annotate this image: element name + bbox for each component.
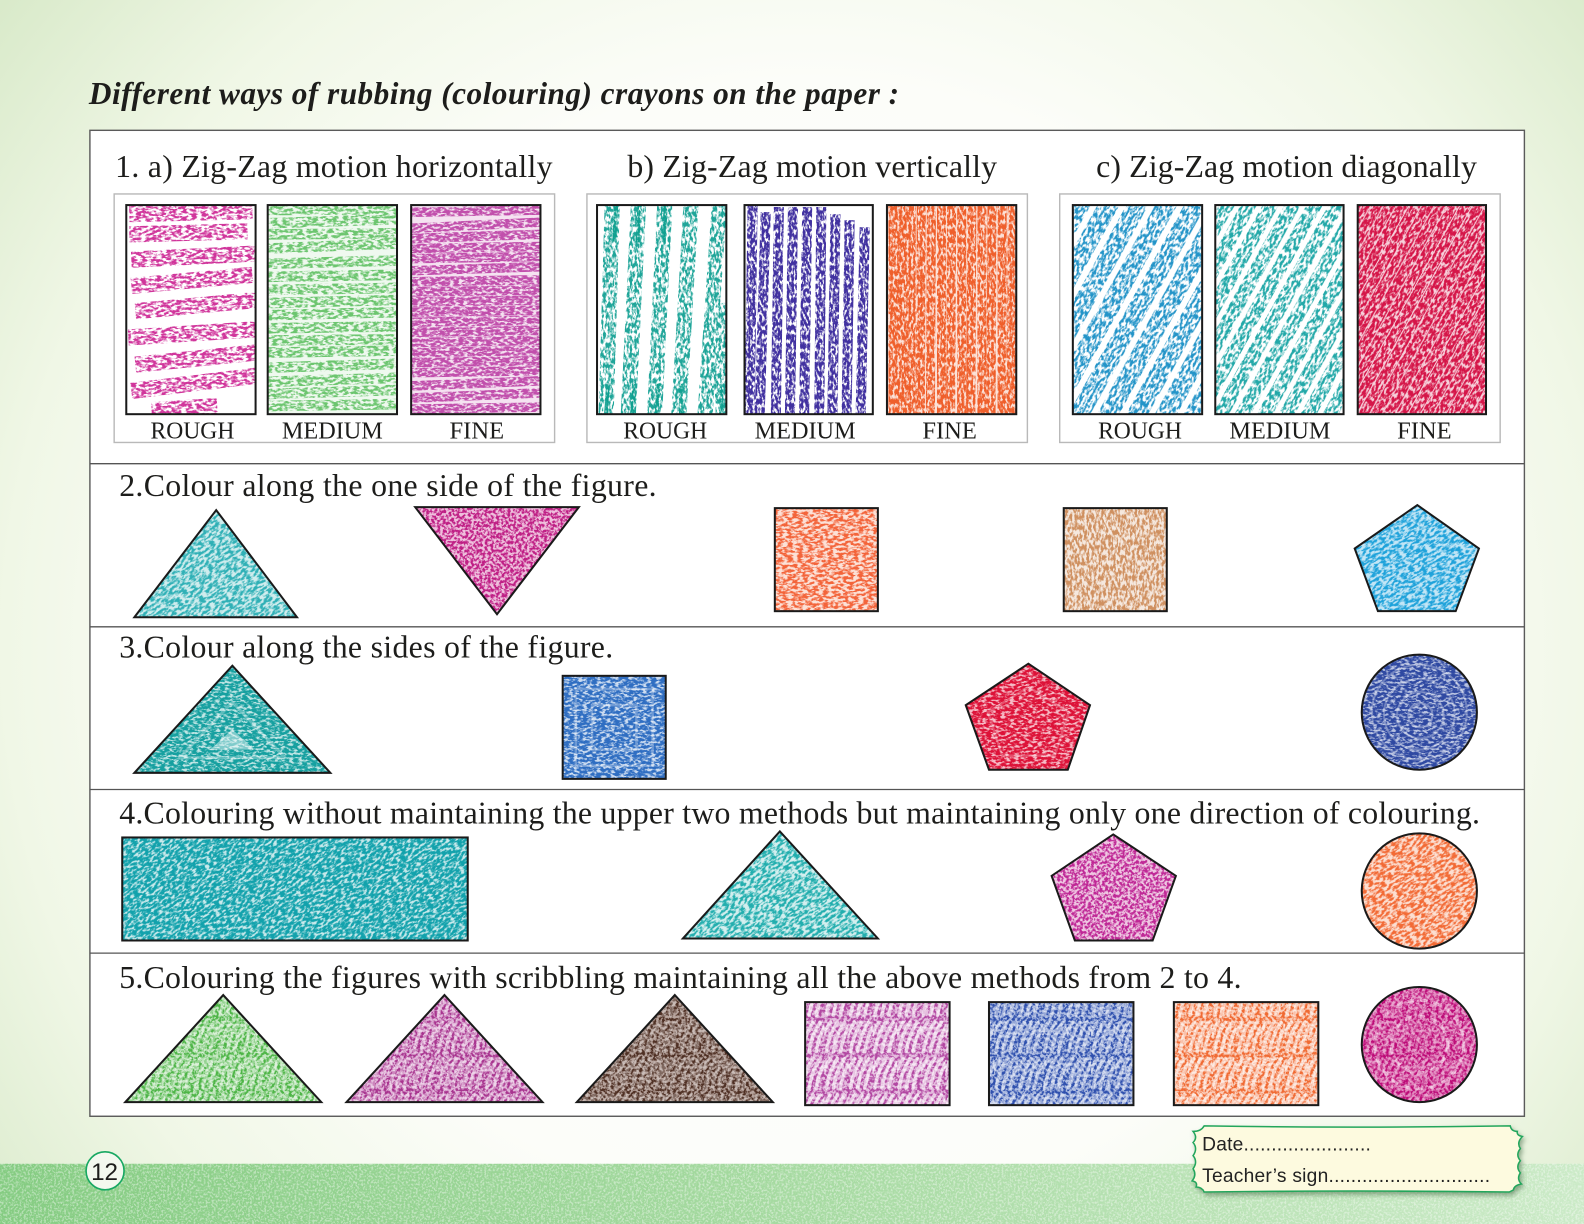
swatch: diagonal fine: [1356, 204, 1487, 416]
page number badge: 12: [91, 1159, 118, 1186]
section 1: zig-zag motions: [114, 154, 1501, 444]
page number badge: [86, 1152, 124, 1190]
shape: purple scribble triangle: [347, 995, 542, 1102]
teacher's sign line: Teacher’s sign.............................: [1202, 1166, 1490, 1187]
heading 3: 3.Colour along the sides of the figure.: [119, 630, 613, 665]
label: rough: ROUGH: [151, 417, 234, 444]
section 2: colour along one side: [120, 474, 1480, 618]
shape: magenta inverted triangle: [415, 507, 579, 614]
textured green footer band: [0, 1164, 1584, 1224]
shape: blue pentagon: [1354, 504, 1480, 612]
swatch: diagonal medium: [1214, 204, 1345, 416]
shape: blue scribble rectangle: [989, 1002, 1133, 1105]
heading 1a: 1. a) Zig-Zag motion horizontally: [115, 149, 553, 184]
group a: horizontal zig-zag: [114, 149, 555, 444]
shape: orange circle: [1360, 832, 1478, 950]
date line: Date.......................: [1202, 1135, 1371, 1156]
shape: red pentagon: [966, 664, 1090, 770]
section 4: one direction of colouring: [120, 801, 1478, 950]
swatch: vertical medium: [745, 205, 873, 414]
heading 5: 5.Colouring the figures with scribbling maintaining all the above methods from 2 to 4.: [119, 960, 1242, 995]
section 3: colour along the sides: [119, 630, 1477, 779]
shape: teal rectangle: [121, 836, 469, 942]
shape: blue concentric square: [563, 676, 666, 779]
label: rough: ROUGH: [623, 417, 707, 444]
shape: orange scribble rectangle: [1174, 1002, 1318, 1105]
swatch: horizontal medium: [268, 205, 397, 414]
shape: tan square: [1064, 508, 1167, 611]
heading 4: 4.Colouring without maintaining the upper two methods but maintaining only one direction of colouring.: [119, 795, 1480, 830]
panel: main worksheet frame: [90, 130, 1524, 1116]
title: Different ways of rubbing (colouring) crayons on the paper :: [88, 76, 899, 111]
label: fine: FINE: [1397, 417, 1452, 444]
swatch: diagonal rough: [1072, 204, 1204, 416]
heading 1b: b) Zig-Zag motion vertically: [627, 149, 997, 184]
heading 1c: c) Zig-Zag motion diagonally: [1096, 149, 1477, 184]
swatch: horizontal fine: [411, 205, 540, 414]
shape: teal concentric triangle: [134, 666, 330, 773]
swatch: vertical rough: [597, 205, 726, 414]
shape: purple scribble rectangle: [805, 1002, 950, 1105]
group c: diagonal zig-zag: [1059, 154, 1501, 444]
label: medium: MEDIUM: [1229, 417, 1330, 444]
shape: magenta scribble circle: [1362, 987, 1477, 1102]
label: medium: MEDIUM: [755, 417, 856, 444]
shape: green scribble triangle: [125, 995, 321, 1102]
label: rough: ROUGH: [1098, 417, 1182, 444]
section 5: scribbling: [119, 960, 1477, 1105]
shape: teal triangle: [680, 830, 880, 940]
label: medium: MEDIUM: [282, 417, 383, 444]
swatch: horizontal rough: [126, 205, 256, 414]
label: fine: FINE: [450, 417, 504, 444]
shape: brown scribble triangle: [577, 995, 773, 1102]
swatch: vertical fine: [887, 205, 1016, 414]
heading 2: 2.Colour along the one side of the figure.: [119, 468, 657, 503]
shape: magenta pentagon: [1052, 834, 1176, 940]
group b: vertical zig-zag: [587, 149, 1027, 444]
shape: orange square: [775, 508, 878, 611]
date and teacher's sign box: [1192, 1126, 1522, 1192]
shape: teal triangle: [132, 508, 299, 618]
shape: indigo spiral circle: [1362, 655, 1477, 770]
label: fine: FINE: [922, 417, 977, 444]
